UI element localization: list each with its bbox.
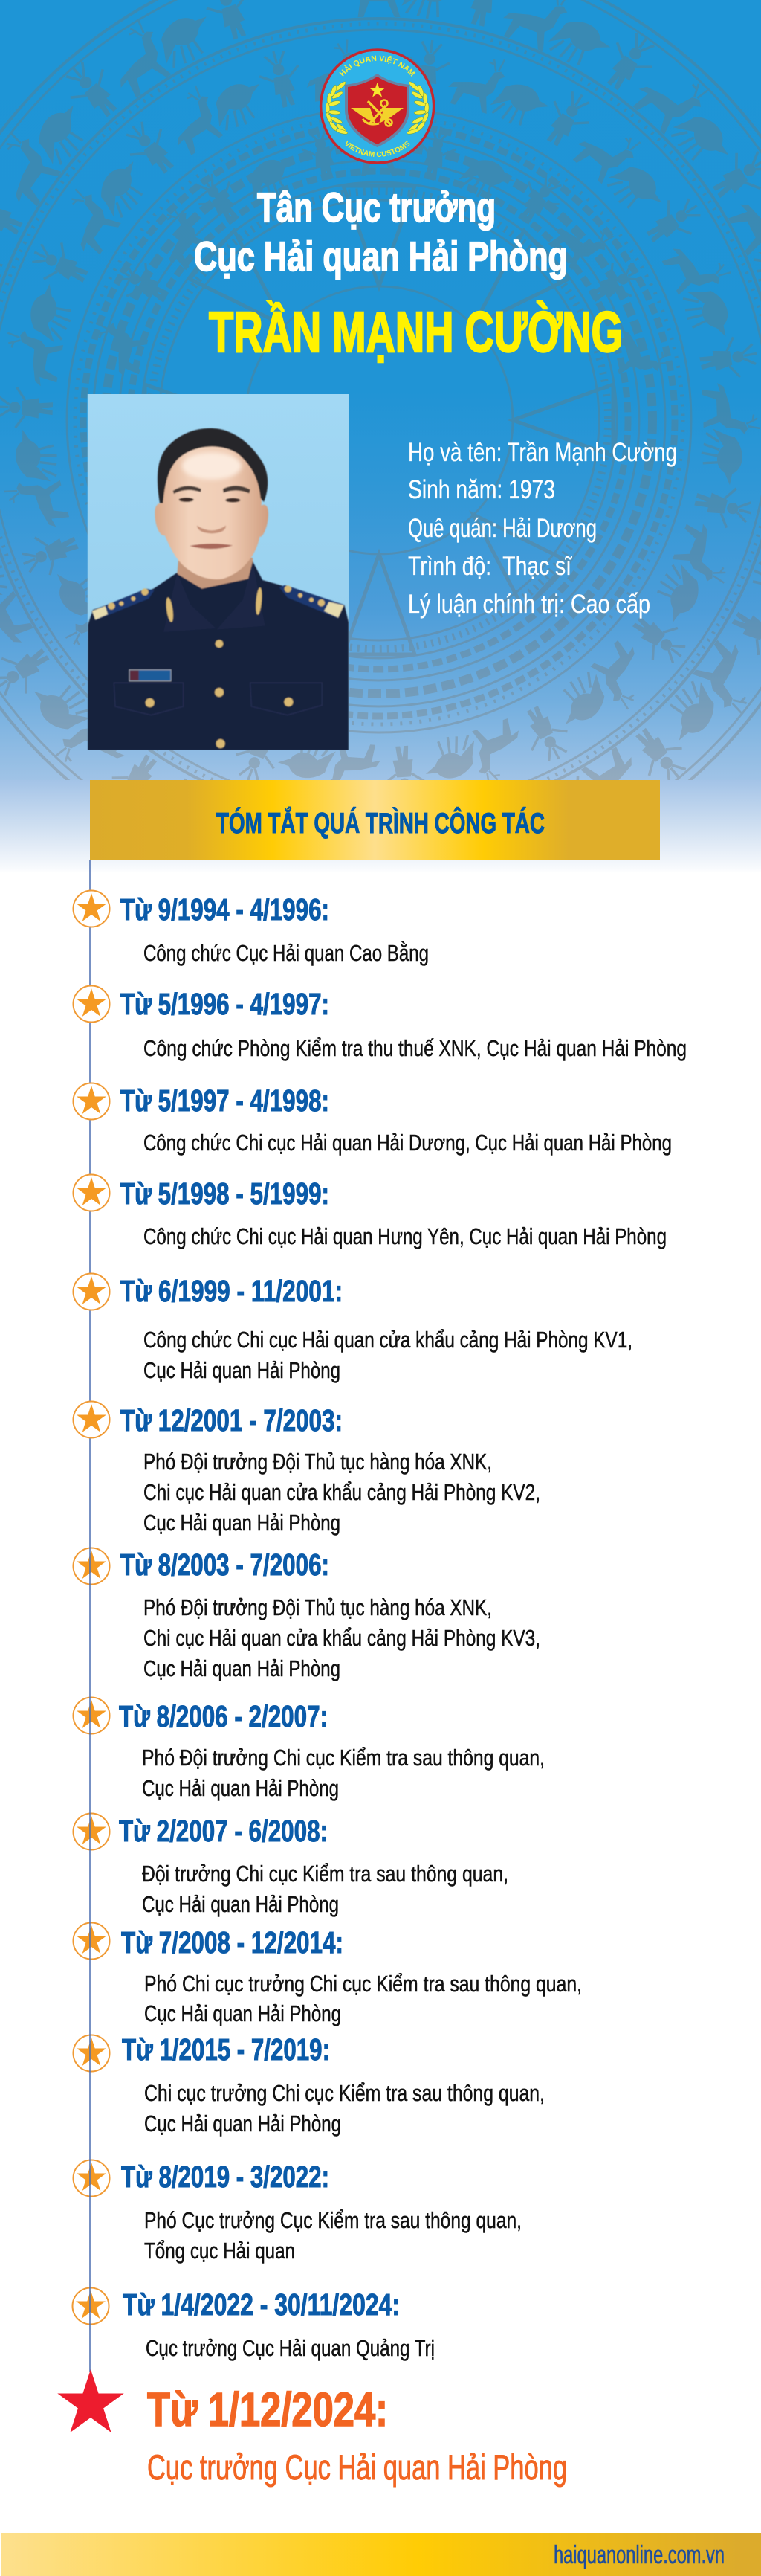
logo: Vietnam Customs emblem: HẢI QUAN VIỆT NAM: [339, 55, 415, 77]
entry 9: [73, 1813, 508, 1917]
entry 7: Chi cục Hải quan cửa khẩu cảng Hải Phòng KV3,: [143, 1625, 540, 1651]
entry 7: Cục Hải quan Hải Phòng: [143, 1655, 340, 1681]
entry 7: Phó Đội trưởng Đội Thủ tục hàng hóa XNK,: [143, 1594, 492, 1620]
personal information list: [408, 438, 677, 619]
entry 10: Cục Hải quan Hải Phòng: [144, 2000, 341, 2026]
entry 1: Công chức Cục Hải quan Cao Bằng: [143, 940, 429, 966]
title: Tân Cục trưởng, Cục Hải quan Hải Phòng: Tân Cục trưởng: [257, 184, 496, 231]
entry 10: [73, 1923, 582, 2026]
personal information list: Quê quán: Hải Dương: [408, 514, 597, 543]
entry 10: Từ 7/2008 - 12/2014:: [121, 1925, 343, 1960]
entry 5: Cục Hải quan Hải Phòng: [143, 1357, 340, 1383]
personal information list: Lý luận chính trị: Cao cấp: [408, 590, 650, 619]
entry 1: Từ 9/1994 - 4/1996:: [120, 892, 329, 927]
entry 5: [73, 1273, 632, 1383]
entry 6: Từ 12/2001 - 7/2003:: [120, 1403, 343, 1437]
header background: blue gradient: [0, 0, 761, 780]
entry 6: [73, 1401, 540, 1536]
entry 13: Cục trưởng Cục Hải quan Quảng Trị: [146, 2335, 435, 2361]
entry 11: [73, 2032, 545, 2137]
logo: Vietnam Customs emblem: VIETNAM CUSTOMS: [345, 140, 410, 157]
entry 1: [73, 891, 429, 966]
entry 3: Từ 5/1997 - 4/1998:: [120, 1083, 329, 1118]
entry 12: [73, 2160, 522, 2264]
entry 2: [73, 986, 687, 1061]
entry 4: Từ 5/1998 - 5/1999:: [120, 1176, 329, 1211]
entry 2: Từ 5/1996 - 4/1997:: [120, 987, 329, 1021]
entry 3: [73, 1083, 672, 1156]
title: Tân Cục trưởng, Cục Hải quan Hải Phòng: Cục Hải quan Hải Phòng: [194, 233, 568, 280]
entry 11: Từ 1/2015 - 7/2019:: [122, 2032, 330, 2067]
lower background fade: [0, 780, 761, 873]
portrait photo: [88, 394, 349, 750]
entry 7: [73, 1548, 540, 1681]
entry 12: Phó Cục trưởng Cục Kiểm tra sau thông quan,: [144, 2207, 522, 2233]
entry 6: Cục Hải quan Hải Phòng: [143, 1510, 340, 1536]
background pattern: bronze drum: [0, 0, 761, 780]
current post: red star and heading: [57, 2369, 567, 2487]
timeline line, lower part: [89, 1539, 91, 2372]
section banner: career summary: TÓM TẮT QUÁ TRÌNH CÔNG TÁC: [216, 806, 545, 840]
entry 9: Từ 2/2007 - 6/2008:: [119, 1814, 328, 1848]
title: Tân Cục trưởng, Cục Hải quan Hải Phòng: [194, 184, 568, 280]
entry 8: Phó Đội trưởng Chi cục Kiểm tra sau thông quan,: [142, 1745, 545, 1771]
footer bar with website: [1, 2533, 761, 2576]
entry 8: Từ 8/2006 - 2/2007:: [119, 1699, 328, 1733]
entry 5: Công chức Chi cục Hải quan cửa khẩu cảng Hải Phòng KV1,: [143, 1327, 632, 1353]
entry 10: Phó Chi cục trưởng Chi cục Kiểm tra sau thông quan,: [144, 1971, 582, 1997]
entry 9: Cục Hải quan Hải Phòng: [142, 1891, 339, 1917]
entry 8: [73, 1697, 545, 1801]
entry 11: Chi cục trưởng Chi cục Kiểm tra sau thông quan,: [144, 2080, 545, 2106]
current post: red star and heading: Từ 1/12/2024:: [147, 2383, 388, 2436]
entry 6: Phó Đội trưởng Đội Thủ tục hàng hóa XNK,: [143, 1449, 492, 1475]
entry 11: Cục Hải quan Hải Phòng: [144, 2110, 341, 2137]
current post: red star and heading: Cục trưởng Cục Hải quan Hải Phòng: [147, 2447, 567, 2487]
entry 7: Từ 8/2003 - 7/2006:: [120, 1548, 329, 1582]
entry 9: Đội trưởng Chi cục Kiểm tra sau thông quan,: [142, 1861, 508, 1887]
entry 5: Từ 6/1999 - 11/2001:: [120, 1274, 343, 1308]
entry 13: [73, 2287, 435, 2361]
entry 8: Cục Hải quan Hải Phòng: [142, 1775, 339, 1801]
logo: Vietnam Customs emblem: [320, 48, 435, 164]
entry 4: [73, 1175, 667, 1249]
section banner: career summary: [90, 780, 660, 860]
entry 6: Chi cục Hải quan cửa khẩu cảng Hải Phòng KV2,: [143, 1479, 540, 1505]
entry 12: Tổng cục Hải quan: [144, 2238, 295, 2264]
entry 13: Từ 1/4/2022 - 30/11/2024:: [123, 2287, 400, 2322]
timeline line: [89, 860, 91, 1539]
personal information list: Sinh năm: 1973: [408, 475, 555, 504]
personal information list: Họ và tên: Trần Mạnh Cường: [408, 438, 677, 467]
personal information list: Trình độ: Thạc sĩ: [408, 552, 573, 581]
entry 12: Từ 8/2019 - 3/2022:: [121, 2160, 329, 2194]
